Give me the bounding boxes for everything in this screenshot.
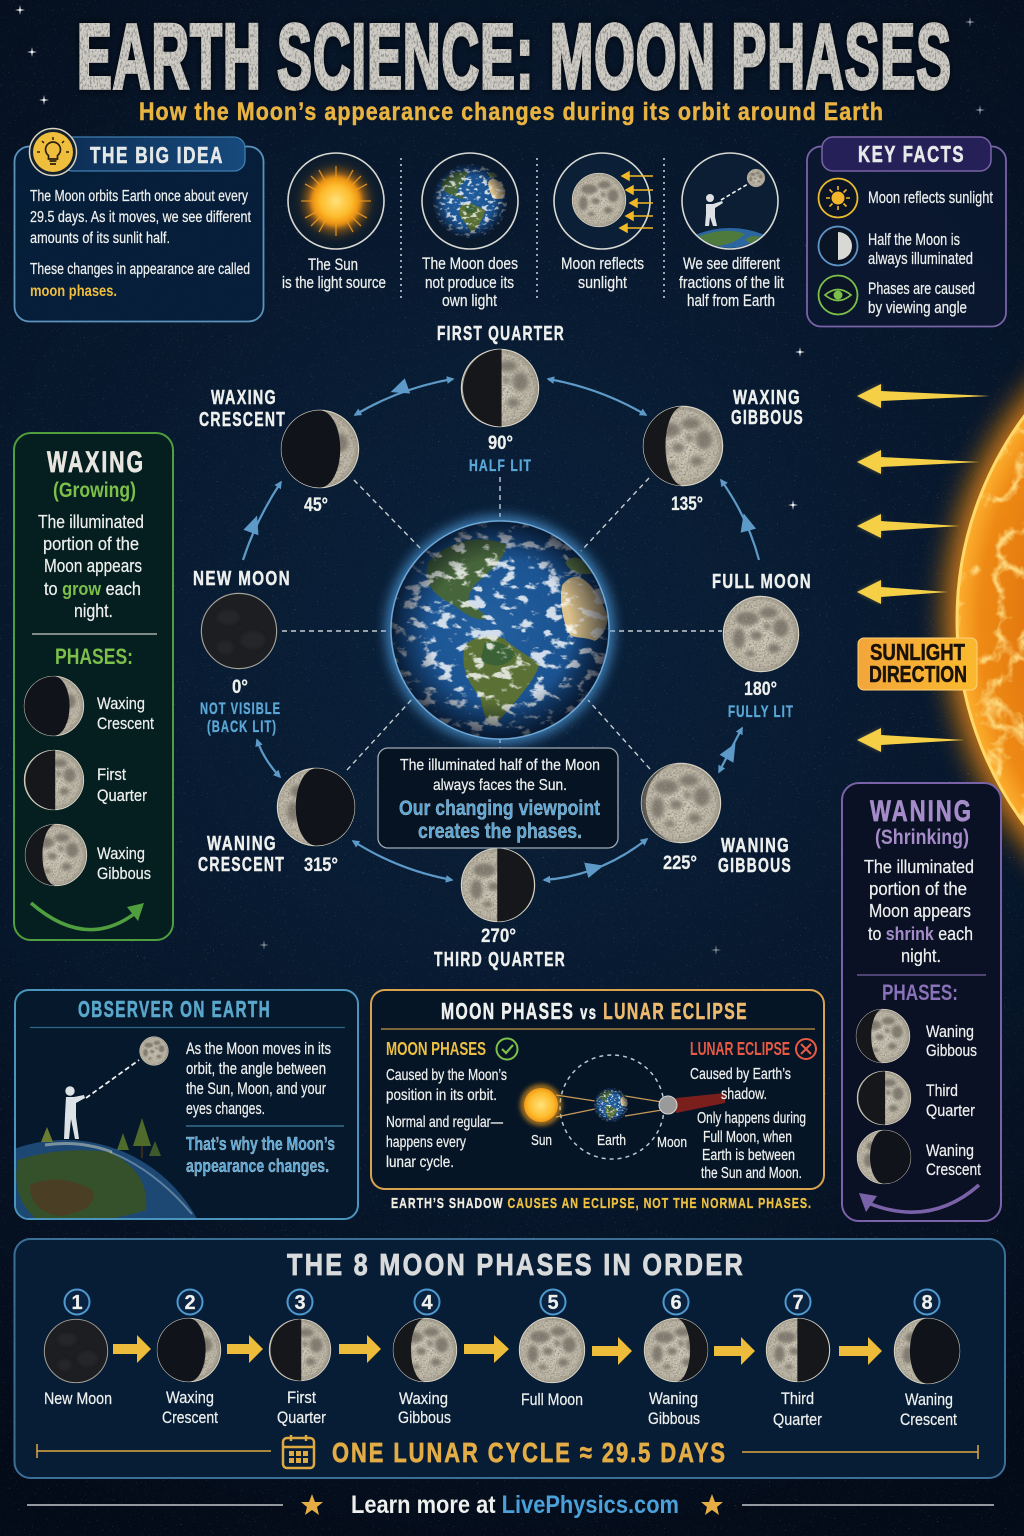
panel: the big idea bbox=[14, 128, 264, 322]
body text: These changes in appearance are called bbox=[30, 261, 250, 278]
orbit labels bbox=[193, 323, 812, 971]
body text: orbit, the angle between bbox=[186, 1060, 326, 1078]
moon: full moon bbox=[723, 596, 799, 672]
dashed sight lines bbox=[282, 477, 722, 770]
moon phases column: Normal and regular— bbox=[386, 1114, 503, 1131]
degree labels bbox=[232, 433, 777, 947]
moon: waning gibbous bbox=[641, 763, 721, 843]
badge numbers: 8 bbox=[921, 1292, 933, 1314]
key fact text: by viewing angle bbox=[868, 299, 967, 317]
body text: amounts of its sunlit half. bbox=[30, 230, 170, 247]
captions for concept icons bbox=[282, 255, 784, 310]
moon: waning crescent bbox=[857, 1130, 911, 1184]
icon: calendar bbox=[283, 1435, 314, 1468]
lunar eclipse column bbox=[690, 1039, 816, 1182]
captions for concept icons: We see different bbox=[683, 255, 780, 273]
key fact text: Moon reflects sunlight bbox=[868, 189, 993, 207]
light state labels: HALF LIT bbox=[469, 456, 532, 475]
lunar eclipse column: LUNAR ECLIPSE bbox=[690, 1039, 790, 1059]
phase names: Quarter bbox=[926, 1101, 975, 1120]
phase names: Full Moon bbox=[521, 1390, 583, 1409]
moon phases column: happens every bbox=[386, 1134, 466, 1151]
phase names: Quarter bbox=[773, 1410, 822, 1429]
light state labels: NOT VISIBLE bbox=[200, 699, 281, 718]
callout: viewpoint: The illuminated half of the Moon bbox=[400, 757, 600, 774]
number badges bbox=[64, 1290, 940, 1314]
moon: waxing gibbous bbox=[643, 406, 723, 486]
phase names: Gibbous bbox=[648, 1409, 700, 1428]
degree labels: 270° bbox=[481, 926, 516, 947]
callout: viewpoint bbox=[378, 748, 618, 848]
icon: cross bbox=[796, 1039, 816, 1059]
orbit labels: WAXING bbox=[211, 387, 277, 409]
moon: waxing gibbous bbox=[25, 824, 87, 886]
callout text bbox=[186, 1134, 335, 1176]
body text: The Moon orbits Earth once about every bbox=[30, 188, 248, 205]
body text: portion of the bbox=[43, 534, 139, 554]
footer text: Learn more at LivePhysics.com bbox=[351, 1491, 679, 1519]
body text: eyes changes. bbox=[186, 1100, 265, 1118]
light state labels bbox=[200, 456, 794, 736]
body text: the Sun, Moon, and your bbox=[186, 1080, 326, 1098]
badge numbers: 4 bbox=[421, 1292, 433, 1314]
heading pill bbox=[822, 137, 991, 171]
captions for concept icons: is the light source bbox=[282, 274, 386, 292]
phase names: Third bbox=[781, 1389, 814, 1408]
phase names: Waxing bbox=[166, 1388, 214, 1407]
degree labels: 135° bbox=[671, 494, 703, 515]
icon: check bbox=[496, 1038, 518, 1060]
body text bbox=[864, 857, 974, 966]
eclipse diagram: Earth bbox=[597, 1132, 626, 1149]
badge numbers: 3 bbox=[294, 1292, 306, 1314]
phase names: Quarter bbox=[277, 1408, 326, 1427]
degree labels: 0° bbox=[232, 677, 248, 698]
body text: to shrink each bbox=[868, 924, 973, 944]
orbit labels: WAXING bbox=[733, 387, 801, 409]
captions for concept icons: The Moon does bbox=[422, 255, 518, 273]
phase names bbox=[44, 1388, 957, 1429]
icon: star left bbox=[301, 1494, 323, 1515]
body text bbox=[38, 512, 144, 621]
orbit labels: GIBBOUS bbox=[718, 855, 792, 877]
phase names: Waxing bbox=[97, 844, 145, 863]
callout text: That’s why the Moon’s bbox=[186, 1134, 335, 1154]
degree labels: 45° bbox=[304, 495, 328, 516]
eclipse note: EARTH’S SHADOW CAUSES AN ECLIPSE, NOT THE NORMAL PHASES. bbox=[391, 1195, 812, 1212]
phase names: Quarter bbox=[97, 786, 147, 805]
moon: third quarter bbox=[461, 848, 535, 922]
moon phases column: position in its orbit. bbox=[386, 1087, 497, 1104]
earth bbox=[386, 516, 614, 744]
captions for concept icons: fractions of the lit bbox=[679, 274, 784, 292]
heading: OBSERVER ON EARTH bbox=[78, 996, 271, 1022]
captions for concept icons: half from Earth bbox=[687, 292, 775, 310]
icon: eye bbox=[818, 276, 858, 314]
illustration: earth and observer bbox=[16, 1036, 196, 1218]
moon sequence bbox=[44, 1317, 960, 1384]
heading: WAXING bbox=[47, 446, 145, 479]
body text: night. bbox=[901, 946, 941, 966]
badge numbers: 5 bbox=[547, 1292, 559, 1314]
moon: third quarter bbox=[857, 1071, 911, 1125]
phase names: Waxing bbox=[97, 694, 145, 713]
body text bbox=[186, 1040, 331, 1118]
key fact text: Phases are caused bbox=[868, 280, 975, 298]
degree labels: 90° bbox=[488, 433, 513, 454]
heading pill: THE BIG IDEA bbox=[90, 142, 224, 168]
phase names: Gibbous bbox=[398, 1408, 451, 1427]
moon: waxing crescent bbox=[281, 410, 359, 488]
moon phases column: Caused by the Moon’s bbox=[386, 1067, 507, 1084]
moon phases column: MOON PHASES bbox=[386, 1039, 486, 1059]
phase names: Crescent bbox=[97, 714, 154, 733]
cycle brackets bbox=[37, 1444, 978, 1459]
phase names: Gibbous bbox=[97, 864, 151, 883]
orbit labels: FIRST QUARTER bbox=[437, 323, 565, 345]
phase names: First bbox=[97, 765, 126, 784]
heading: WANING bbox=[870, 795, 973, 828]
panel: moon phases vs lunar eclipse bbox=[371, 990, 824, 1189]
phase names bbox=[97, 694, 154, 883]
captions for concept icons: own light bbox=[442, 292, 497, 310]
label: sunlight direction bbox=[858, 638, 977, 690]
callout: viewpoint: Our changing viewpoint bbox=[399, 797, 600, 820]
lunar eclipse column: Earth is between bbox=[702, 1147, 795, 1164]
lunar eclipse column: Full Moon, when bbox=[703, 1129, 792, 1146]
captions for concept icons: sunlight bbox=[578, 274, 627, 292]
moon phases column bbox=[386, 1038, 518, 1171]
body text: The illuminated bbox=[38, 512, 144, 532]
badge numbers: 2 bbox=[184, 1292, 196, 1314]
key fact text: always illuminated bbox=[868, 250, 973, 268]
moon: waxing crescent bbox=[24, 676, 84, 736]
moon: waning gibbous bbox=[856, 1009, 910, 1063]
light state labels: FULLY LIT bbox=[728, 702, 794, 721]
lunar eclipse column: the Sun and Moon. bbox=[701, 1165, 802, 1182]
degree labels: 315° bbox=[304, 855, 338, 876]
body text: The illuminated bbox=[864, 857, 974, 877]
heading pill bbox=[62, 137, 245, 171]
label: sunlight direction: DIRECTION bbox=[869, 661, 967, 687]
subheading: (Growing) bbox=[53, 479, 136, 502]
icon: sun source bbox=[288, 153, 384, 249]
orbit labels: WANING bbox=[207, 833, 277, 855]
moon: waning crescent bbox=[277, 768, 355, 846]
phases heading: PHASES: bbox=[55, 644, 133, 669]
sun bbox=[945, 266, 1024, 974]
moon: new moon bbox=[201, 593, 277, 669]
arrow: growing bbox=[31, 903, 144, 930]
body text: moon phases. bbox=[30, 283, 117, 300]
arrow: shrinking bbox=[859, 1185, 979, 1212]
orbit labels: CRESCENT bbox=[199, 409, 286, 431]
captions for concept icons: The Sun bbox=[308, 256, 358, 274]
orbit labels: NEW MOON bbox=[193, 568, 291, 590]
orbit arrows bbox=[243, 378, 759, 880]
phase names: Waning bbox=[926, 1022, 974, 1041]
phase names: Waxing bbox=[399, 1389, 448, 1408]
lunar eclipse column: Only happens during bbox=[697, 1110, 806, 1127]
eclipse diagram bbox=[520, 1055, 725, 1159]
panel: waxing bbox=[14, 433, 173, 940]
eclipse diagram: Moon bbox=[657, 1134, 687, 1151]
body text: 29.5 days. As it moves, we see different bbox=[30, 209, 252, 226]
phase names: Third bbox=[926, 1081, 958, 1100]
panel: observer on earth bbox=[14, 989, 359, 1220]
subtitle: How the Moon’s appearance changes during its orbit around Earth bbox=[139, 98, 884, 126]
moon: first quarter bbox=[461, 349, 539, 427]
lunar eclipse column: Caused by Earth’s bbox=[690, 1066, 791, 1083]
phase names: First bbox=[287, 1388, 316, 1407]
body text: to grow each bbox=[44, 579, 141, 599]
dotted dividers bbox=[401, 158, 664, 302]
heading pill: KEY FACTS bbox=[858, 141, 965, 167]
orbit labels: GIBBOUS bbox=[731, 407, 804, 429]
phase names bbox=[926, 1022, 981, 1179]
badge numbers: 7 bbox=[792, 1292, 804, 1314]
phase names: New Moon bbox=[44, 1389, 112, 1408]
phase names: Waning bbox=[905, 1390, 953, 1409]
callout: viewpoint: always faces the Sun. bbox=[433, 777, 567, 794]
orbit labels: WANING bbox=[721, 835, 790, 857]
body text: Moon appears bbox=[869, 901, 971, 921]
orbit labels: FULL MOON bbox=[712, 571, 812, 593]
icon: earth no light bbox=[422, 153, 518, 249]
moon: first quarter bbox=[24, 750, 84, 810]
callout: viewpoint: creates the phases. bbox=[418, 820, 582, 843]
subheading: (Shrinking) bbox=[875, 826, 969, 849]
icon: light bulb bbox=[30, 128, 76, 176]
footer bbox=[27, 1491, 994, 1519]
phase names: Waning bbox=[926, 1141, 974, 1160]
orbit labels: THIRD QUARTER bbox=[434, 949, 566, 971]
degree labels: 180° bbox=[744, 679, 777, 700]
captions for concept icons: Moon reflects bbox=[561, 255, 644, 273]
heading: THE 8 MOON PHASES IN ORDER bbox=[287, 1247, 745, 1282]
phase names: Gibbous bbox=[926, 1041, 977, 1060]
badge numbers: 6 bbox=[670, 1292, 682, 1314]
icon: star right bbox=[701, 1494, 723, 1515]
phase names: Waning bbox=[649, 1389, 698, 1408]
body text bbox=[30, 188, 252, 300]
sequence arrows bbox=[113, 1335, 882, 1365]
phases heading: PHASES: bbox=[882, 980, 958, 1005]
arrows: sunlight direction bbox=[857, 384, 990, 752]
phase names: Crescent bbox=[162, 1408, 218, 1427]
cycle length: ONE LUNAR CYCLE ≈ 29.5 DAYS bbox=[332, 1437, 727, 1468]
captions for concept icons: not produce its bbox=[425, 274, 514, 292]
phase names: Crescent bbox=[900, 1410, 957, 1429]
key fact text: Half the Moon is bbox=[868, 231, 960, 249]
body text: night. bbox=[74, 601, 113, 621]
moon phases column: lunar cycle. bbox=[386, 1154, 454, 1171]
callout text: appearance changes. bbox=[186, 1156, 329, 1176]
panel: key facts bbox=[807, 137, 1006, 326]
badge numbers: 1 bbox=[71, 1292, 83, 1314]
icon: sun bbox=[818, 178, 858, 218]
body text: portion of the bbox=[869, 879, 967, 899]
phase names: Crescent bbox=[926, 1160, 981, 1179]
lunar eclipse column: shadow. bbox=[721, 1086, 767, 1103]
body text: As the Moon moves in its bbox=[186, 1040, 331, 1058]
orbit labels: CRESCENT bbox=[198, 854, 285, 876]
icon: moon reflects sunlight bbox=[554, 153, 653, 249]
key fact text bbox=[868, 189, 993, 317]
icon: observer sees moon bbox=[681, 152, 779, 250]
degree labels: 225° bbox=[663, 853, 697, 874]
eclipse diagram: Sun bbox=[531, 1132, 552, 1149]
icon: half moon bbox=[818, 226, 858, 266]
panel: waning bbox=[842, 783, 1001, 1221]
badge numbers bbox=[71, 1292, 933, 1314]
label: sunlight direction: SUNLIGHT bbox=[870, 639, 965, 665]
heading: MOON PHASES vs LUNAR ECLIPSE bbox=[441, 998, 748, 1024]
panel: 8 phases in order bbox=[14, 1239, 1005, 1478]
light state labels: (BACK LIT) bbox=[207, 717, 277, 736]
body text: Moon appears bbox=[44, 556, 142, 576]
